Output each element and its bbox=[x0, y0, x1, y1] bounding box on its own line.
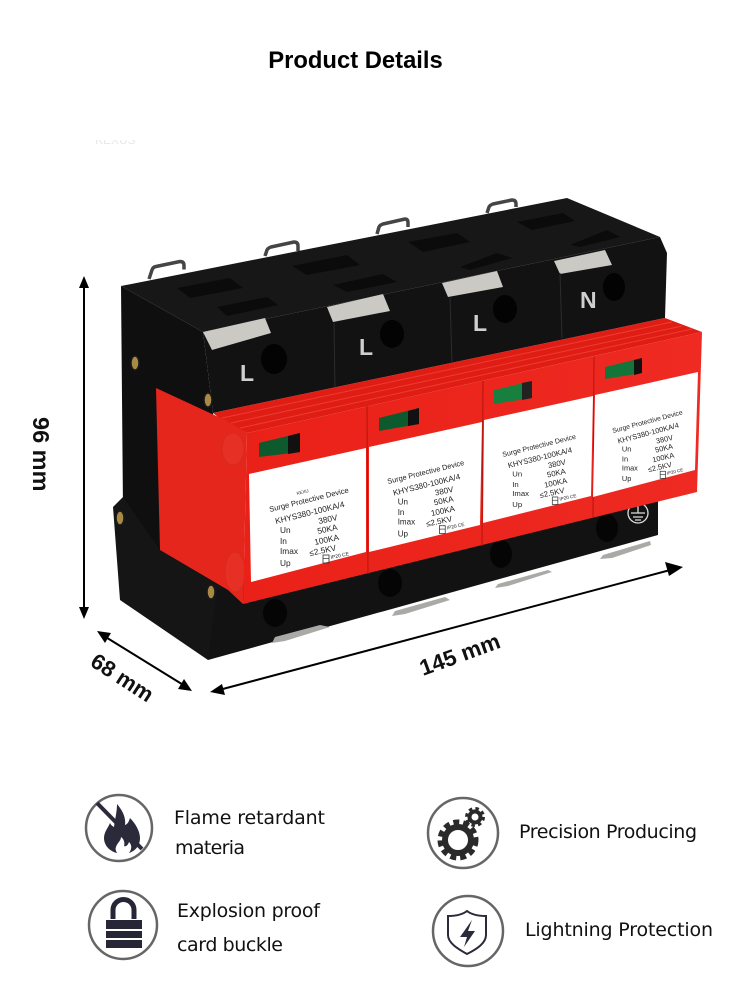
label text 1: KEXU bbox=[296, 488, 309, 496]
label text 1: 50KA bbox=[316, 522, 339, 536]
label text 4: Up bbox=[622, 474, 631, 483]
label text 1: Surge Protective Device bbox=[268, 485, 350, 514]
lower left foot bbox=[113, 497, 250, 660]
arrow: width bbox=[210, 562, 683, 695]
label text 3: In bbox=[512, 480, 519, 489]
label text 4: Un bbox=[622, 445, 631, 454]
label text 4: IP20 CE bbox=[666, 467, 684, 476]
label text 3: Un bbox=[512, 470, 522, 479]
lower terminal holes bbox=[263, 514, 618, 627]
module seams bbox=[367, 357, 594, 574]
label text 4: 50KA bbox=[654, 442, 674, 455]
black housing bbox=[113, 198, 667, 660]
icon: padlock bbox=[89, 891, 157, 959]
rear mounting clips bbox=[149, 200, 516, 279]
red side face bbox=[156, 388, 247, 604]
text: precision producing: Precision Producing bbox=[519, 821, 697, 843]
top face bbox=[121, 198, 660, 332]
label text 4 bbox=[612, 409, 684, 483]
product: surge protective device bbox=[113, 198, 702, 660]
label text 1: ≤2.5KV bbox=[308, 542, 337, 558]
terminal letters: N bbox=[580, 287, 597, 313]
label text 1: 100KA bbox=[313, 532, 340, 547]
white label panels bbox=[249, 372, 698, 582]
ground symbol bbox=[628, 503, 648, 523]
red top ribs bbox=[213, 318, 702, 433]
label text 2: ≤2.5KV bbox=[425, 514, 454, 529]
label text 2: Up bbox=[398, 529, 409, 538]
red module bbox=[156, 318, 702, 604]
dimension: 145 mm: 145 mm bbox=[416, 629, 503, 681]
label text 3: IP20 CE bbox=[559, 493, 577, 502]
label text 4: Surge Protective Device bbox=[612, 409, 684, 435]
label text 4: 380V bbox=[655, 433, 674, 446]
lower front face bbox=[208, 480, 658, 660]
brass screws bbox=[116, 356, 215, 599]
terminal letters: L bbox=[473, 310, 487, 336]
text: lightning protection: Lightning Protection bbox=[525, 919, 713, 941]
arrow: height bbox=[79, 276, 89, 619]
label text 1 bbox=[268, 485, 350, 568]
label text 1: Imax bbox=[280, 546, 299, 556]
terminal letters: L bbox=[359, 334, 373, 360]
label text 2: Surge Protective Device bbox=[386, 458, 465, 486]
feature: explosion proof bbox=[89, 891, 321, 959]
feature: flame retardant bbox=[86, 795, 325, 861]
feature: lightning protection bbox=[433, 896, 713, 966]
top openings bbox=[177, 213, 620, 316]
feature: precision producing bbox=[428, 798, 697, 868]
label text 2: 380V bbox=[434, 485, 455, 498]
label text 1: KHYS380-100KA/4 bbox=[274, 499, 346, 526]
red side bosses bbox=[222, 433, 245, 592]
label text 2: In bbox=[398, 508, 404, 517]
label text 3: 50KA bbox=[546, 467, 567, 479]
label text 2 bbox=[386, 458, 466, 538]
arrow: depth bbox=[97, 631, 192, 691]
label text 1: In bbox=[280, 536, 287, 546]
label text 3: ≤2.5KV bbox=[539, 486, 566, 500]
label text 3: Surge Protective Device bbox=[502, 434, 577, 459]
grey terminal strips bbox=[203, 250, 612, 350]
label text 3 bbox=[502, 434, 577, 509]
status windows bbox=[259, 358, 642, 457]
text: flame retardant material: Flame retardant bbox=[174, 807, 325, 829]
label text 2: 50KA bbox=[433, 494, 455, 507]
label text 1: 380V bbox=[317, 512, 339, 526]
upper left body bbox=[121, 286, 240, 600]
text: flame retardant material bbox=[174, 807, 325, 859]
red front face bbox=[243, 332, 702, 604]
label text 1: Up bbox=[280, 558, 291, 568]
upper front face bbox=[203, 237, 667, 413]
label text 2: Imax bbox=[398, 518, 415, 527]
label text 1: IP20 CE bbox=[330, 551, 350, 561]
label text 3: KHYS380-100KA/4 bbox=[507, 445, 574, 470]
icon: lightning shield bbox=[433, 896, 503, 966]
dimension: 96 mm: 96 mm bbox=[28, 417, 54, 491]
terminal holes bbox=[261, 273, 625, 374]
label text 4: In bbox=[622, 454, 628, 463]
text: explosion proof card buckle: card buckle bbox=[177, 934, 283, 956]
unit dividers bbox=[334, 273, 562, 390]
icon: crossed-out flame bbox=[86, 795, 152, 861]
label text 4: 100KA bbox=[651, 451, 675, 464]
label text 4: Imax bbox=[622, 463, 638, 472]
text: explosion proof card buckle bbox=[177, 900, 321, 956]
faint watermark: KEXUS bbox=[95, 133, 136, 147]
text: flame retardant material: materia bbox=[175, 837, 245, 859]
terminal letters bbox=[240, 287, 597, 386]
label text 3: 100KA bbox=[543, 476, 569, 490]
label text 2: IP20 CE bbox=[446, 522, 466, 532]
label text 3: Up bbox=[512, 500, 522, 509]
title: Product Details bbox=[268, 47, 443, 74]
label text 4: ≤2.5KV bbox=[647, 460, 673, 474]
lower metal strips bbox=[272, 541, 651, 643]
label text 2: 100KA bbox=[430, 504, 456, 518]
label text 3: Imax bbox=[512, 489, 529, 498]
dimension: 68 mm: 68 mm bbox=[86, 648, 158, 707]
label text 4: KHYS380-100KA/4 bbox=[617, 421, 680, 446]
label text 2: Un bbox=[398, 497, 408, 506]
label text 3: 380V bbox=[547, 457, 567, 470]
icon: gears bbox=[428, 798, 498, 868]
terminal letters: L bbox=[240, 360, 254, 386]
label text 1: Un bbox=[280, 525, 291, 535]
text: explosion proof card buckle: Explosion proof bbox=[177, 900, 321, 922]
label text 2: KHYS380-100KA/4 bbox=[392, 472, 462, 498]
